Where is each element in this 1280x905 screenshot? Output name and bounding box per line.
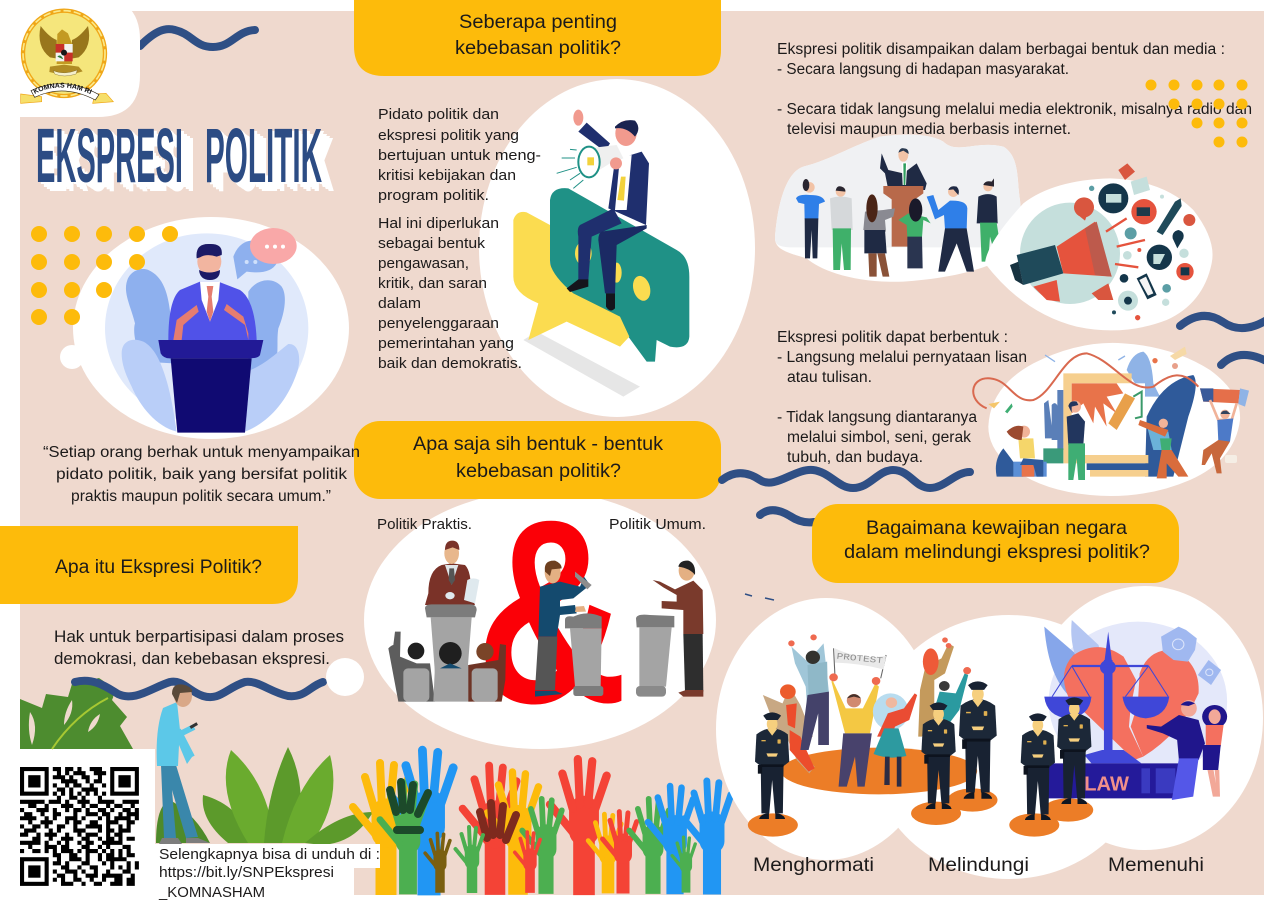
text: forms and media: televisi maupun media berbasis internet. (787, 121, 1071, 138)
orange stages (748, 748, 1093, 837)
circles (716, 586, 1263, 879)
text: quote: “Setiap orang berhak untuk menyampaikan (43, 444, 360, 461)
title shadow: EKSPRESI (42, 118, 189, 204)
heading: Apa itu Ekspresi Politik?: Apa itu Ekspresi Politik? (55, 557, 262, 578)
panel: state obligations illustration (716, 586, 1263, 879)
text: forms of expression: melalui simbol, seni, gerak (787, 429, 971, 446)
text: why political freedom matters: dalam (378, 295, 421, 312)
illustration: person with phone (157, 684, 210, 844)
text: why political freedom matters: baik dan demokratis. (378, 355, 522, 372)
illustration: art and symbols (973, 343, 1249, 496)
label: Menghormati: Menghormati (753, 854, 874, 876)
text: POLITIK (211, 118, 328, 204)
right page margin (1264, 0, 1280, 905)
wave: top left (140, 29, 255, 47)
text: why political freedom matters: program politik. (378, 187, 489, 204)
text: download link: Selengkapnya bisa di unduh di : (159, 846, 380, 863)
text: why political freedom matters: pemerintahan yang (378, 335, 514, 352)
wave: bottom left (75, 681, 323, 697)
ampersand: & (476, 465, 628, 758)
text: download link: https://bit.ly/SNPEkspresi (159, 864, 334, 881)
heading: Seberapa penting: Seberapa penting (459, 11, 617, 33)
text: why political freedom matters: Pidato politik dan (378, 106, 499, 123)
illustration: direct speech to crowd (775, 135, 1023, 282)
white bottom-left footer area (0, 749, 380, 905)
dots: right (1146, 80, 1248, 148)
text: forms and media (777, 41, 1252, 138)
title shadow: EKSPRESI (45, 120, 192, 206)
text: why political freedom matters: Hal ini diperlukan (378, 215, 499, 232)
text: why political freedom matters: penyelenggaraan (378, 315, 499, 332)
heading: kewajiban negara: Bagaimana kewajiban negara (866, 517, 1127, 539)
text: forms of expression: atau tulisan. (787, 369, 872, 386)
text: forms of expression: - Tidak langsung diantaranya (777, 409, 977, 426)
text: forms of expression: - Langsung melalui pernyataan lisan (777, 349, 1027, 366)
text: POLITIK (208, 115, 325, 201)
text: quote: pidato politik, baik yang bersifat politik (56, 466, 347, 483)
text: why political freedom matters: kritisi kebijakan dan (378, 167, 516, 184)
illustration: Politik Praktis and Umum (364, 465, 716, 758)
text: forms and media: Ekspresi politik disampaikan dalam berbagai bentuk dan media : (777, 41, 1225, 58)
text: quote: praktis maupun politik secara umum.” (71, 488, 331, 505)
protest sign text: PROTEST (836, 652, 884, 666)
text: download link: _KOMNASHAM (158, 884, 265, 901)
text: POLITIK (214, 120, 331, 206)
wave: right lower (1221, 355, 1270, 365)
heading: Seberapa penting: kebebasan politik? (455, 37, 621, 59)
text: POLITIK (205, 113, 322, 199)
heading: Apa saja sih bentuk: Apa saja sih bentuk - bentuk (413, 433, 663, 455)
illustration: monstera leaf (20, 678, 133, 749)
heading: Seberapa penting (354, 0, 721, 76)
emblem banner text: KOMNAS HAM RI (33, 82, 92, 94)
title: EKSPRESI (36, 113, 183, 199)
QR code (20, 769, 139, 884)
title shadow: EKSPRESI (48, 122, 195, 208)
label: Melindungi: Melindungi (928, 854, 1029, 876)
text: definition: demokrasi, dan kebebasan ekspresi. (54, 650, 330, 668)
illustration: raised hands (353, 750, 731, 895)
decorative circle (326, 658, 364, 696)
heading: Apa saja sih bentuk: kebebasan politik? (456, 460, 621, 482)
law: scales and heart (1044, 620, 1227, 800)
dashes (745, 594, 774, 600)
text: forms of expression: tubuh, dan budaya. (787, 449, 923, 466)
heading: Apa itu Ekspresi Politik? (0, 526, 298, 604)
text: definition (54, 628, 344, 668)
wave: right upper (1180, 316, 1270, 328)
text: forms of expression (777, 329, 1027, 466)
logo panel: Komnas HAM RI (20, 8, 140, 117)
illustration: megaphone and media (985, 163, 1213, 330)
illustration: plants (156, 747, 373, 845)
text: download link (158, 846, 380, 901)
text: POLITIK (217, 122, 334, 208)
text: why political freedom matters (378, 106, 541, 372)
text: quote (43, 444, 360, 505)
text: why political freedom matters: sebagai bentuk (378, 235, 486, 252)
protesters (763, 634, 971, 787)
text: why political freedom matters: bertujuan untuk meng- (378, 147, 541, 164)
text: why political freedom matters: ekspresi politik yang (378, 127, 519, 144)
text: forms and media: - Secara tidak langsung melalui media elektronik, misalnya radio dan (777, 101, 1252, 118)
text: Politik Umum: Politik Umum. (609, 516, 706, 533)
wave: near header (760, 510, 814, 522)
text: forms of expression: Ekspresi politik dapat berbentuk : (777, 329, 1008, 346)
text: Politik Praktis: Politik Praktis. (377, 516, 472, 533)
illustration: speaker at podium (60, 217, 349, 439)
text: definition: Hak untuk berpartisipasi dalam proses (54, 628, 344, 646)
heading: kewajiban negara: dalam melindungi ekspresi politik? (844, 541, 1150, 563)
label: Memenuhi: Memenuhi (1108, 854, 1204, 876)
white band: download text background (155, 844, 380, 868)
text: why political freedom matters: kritik, dan saran (378, 275, 487, 292)
LAW label: LAW (1084, 772, 1130, 795)
illustration: man on speech bubbles (479, 79, 755, 417)
wave: mid connector (722, 470, 970, 488)
heading: Apa saja sih bentuk (354, 421, 721, 499)
text: why political freedom matters: pengawasan, (378, 255, 469, 272)
police officers (755, 712, 789, 819)
dots: left (31, 226, 178, 325)
text: forms and media: - Secara langsung di hadapan masyarakat. (777, 61, 1069, 78)
title shadow: EKSPRESI (39, 115, 186, 201)
heading: kewajiban negara (812, 504, 1179, 583)
